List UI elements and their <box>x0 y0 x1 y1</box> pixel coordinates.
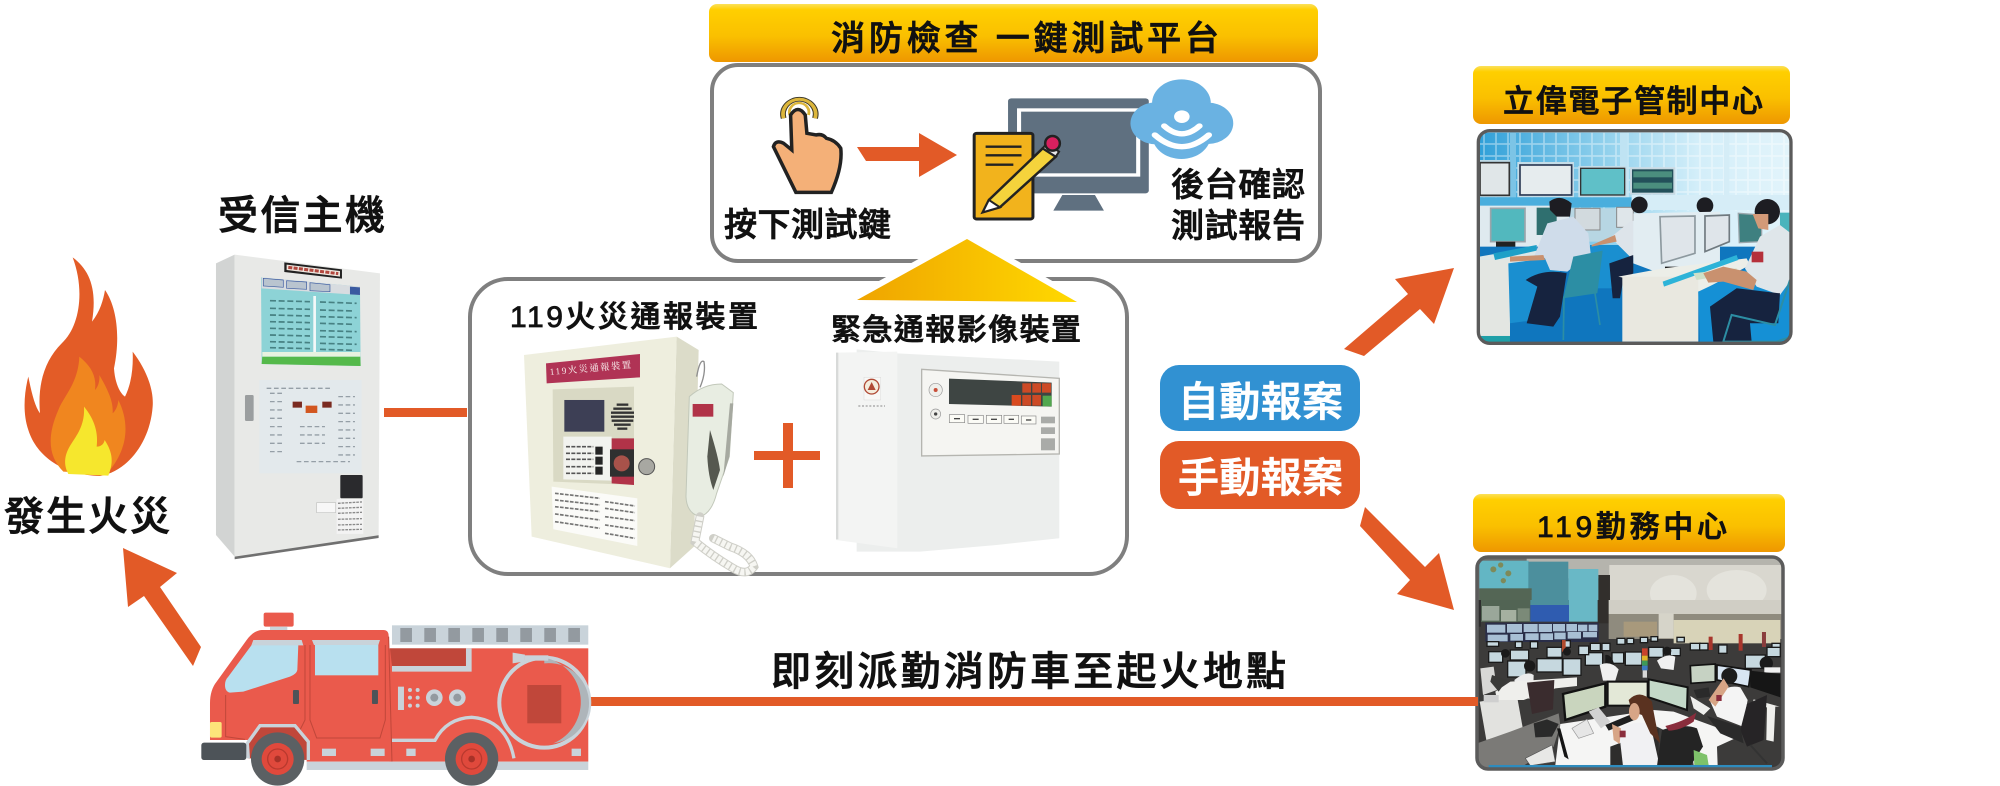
foreground monitors <box>1563 664 1780 720</box>
body <box>389 648 588 762</box>
title: one-touch test platform: 消防檢查 一鍵測試平台 <box>831 20 1219 58</box>
mid people <box>1501 647 1780 700</box>
label: dispatch fire truck: 即刻派勤消防車至起火地點 <box>771 650 1286 694</box>
signal towers <box>1562 632 1766 678</box>
header: Liwei control center: 立偉電子管制中心 <box>1503 84 1763 119</box>
person middle <box>1631 197 1648 213</box>
compartment <box>390 648 472 672</box>
photo frame <box>1477 557 1783 769</box>
left cabinet and desk <box>1480 667 1497 695</box>
ladder <box>392 625 588 645</box>
hose reel <box>499 653 589 748</box>
icon: flame <box>25 257 153 476</box>
coiled cord <box>695 517 754 572</box>
triangle: upward link <box>857 239 1077 302</box>
screen <box>564 400 604 432</box>
floor <box>1480 246 1756 342</box>
indicator lights <box>1012 383 1052 406</box>
badge: manual reporting <box>1160 441 1360 509</box>
printer <box>340 475 363 498</box>
arrow: to 119 dispatch center <box>1360 507 1454 610</box>
left desk <box>1480 246 1537 264</box>
cab <box>210 630 392 762</box>
backpack chair <box>1657 726 1703 766</box>
woman operator <box>1612 695 1660 766</box>
video wall lower section <box>1481 600 1598 622</box>
device: emergency video reporting device <box>836 349 1059 552</box>
label: backend confirms test report: 測試報告 <box>1171 207 1305 244</box>
control window <box>553 387 634 485</box>
label: press test key: 按下測試鍵 <box>724 206 891 243</box>
connector: control panel to devices <box>384 408 467 417</box>
arrow: to Liwei control center <box>1344 268 1454 356</box>
header: 119 dispatch center: 119勤務中心 <box>1537 511 1727 544</box>
heading: fire alarm control panel: 受信主機 <box>218 194 385 238</box>
man operator <box>1707 668 1767 763</box>
person left <box>1549 198 1572 217</box>
label: 119 fire reporting device: 119火災通報裝置 <box>510 301 758 334</box>
mid room monitors <box>1487 637 1780 677</box>
wheels <box>251 732 498 786</box>
badge: automatic reporting: 自動報案 <box>1178 379 1343 425</box>
photo: Liwei control center <box>1478 131 1792 345</box>
label: fire occurs: 發生火災 <box>4 495 170 539</box>
control buttons <box>929 383 1055 450</box>
running board <box>307 749 588 770</box>
control gauges <box>398 687 466 710</box>
door handle <box>245 395 254 421</box>
back partitions <box>1479 206 1569 249</box>
title bar: one-touch test platform <box>709 4 1318 62</box>
upper room <box>1478 558 1782 600</box>
display <box>949 379 1052 407</box>
speaker <box>611 405 634 429</box>
icon: fire truck <box>201 613 589 786</box>
key lock <box>639 459 655 475</box>
windows <box>225 640 380 693</box>
door handles <box>293 690 378 704</box>
hanger <box>697 361 704 387</box>
icon: document and pencil <box>974 133 1060 219</box>
bumper <box>201 743 246 760</box>
icon: pressing finger <box>773 99 841 192</box>
device: fire alarm control panel <box>216 255 380 559</box>
red label: 119火災通報裝置 <box>549 359 632 378</box>
icon: monitor <box>1008 98 1149 211</box>
arrow: press to report <box>857 133 957 177</box>
control face <box>922 369 1059 456</box>
title plate <box>284 262 342 279</box>
beacon <box>264 613 294 627</box>
arrow: truck to fire <box>123 548 201 666</box>
notice sheets <box>317 499 363 534</box>
touch screen <box>261 277 361 366</box>
device: 119 fire reporting device <box>524 337 754 572</box>
wheel arches <box>392 717 514 758</box>
line: dispatch center to truck <box>588 697 1478 706</box>
keyboard and phones <box>1525 687 1710 766</box>
headlight <box>210 722 222 738</box>
centre partition <box>1633 212 1720 273</box>
instructions <box>552 487 637 546</box>
left chair <box>1527 680 1554 714</box>
floor <box>1477 713 1560 770</box>
label: backend confirms test report: 後台確認 <box>1171 166 1305 203</box>
panel: reporting devices <box>470 279 1127 574</box>
photo: 119 dispatch center <box>1477 558 1787 773</box>
lower room <box>1477 600 1787 773</box>
label: emergency video reporting device: 緊急通報影像裝置 <box>831 314 1081 347</box>
foreground desks <box>1555 710 1740 765</box>
plus sign <box>754 423 820 488</box>
monitor wall <box>1485 623 1599 642</box>
badge: automatic reporting <box>1160 365 1360 431</box>
indicator panel <box>259 380 362 473</box>
panel: one-touch test platform <box>712 65 1320 261</box>
header: Liwei control center <box>1473 66 1790 124</box>
badge: manual reporting: 手動報案 <box>1178 455 1343 501</box>
header: 119 dispatch center <box>1473 494 1785 552</box>
door lines <box>226 637 392 762</box>
label: backend confirms test report <box>1171 166 1305 244</box>
handset <box>686 384 733 517</box>
buttons and alarm switch <box>563 437 634 485</box>
red label <box>546 354 640 383</box>
person right <box>1755 199 1780 224</box>
logo <box>858 377 885 406</box>
right desk <box>1618 258 1750 292</box>
icon: cloud wifi <box>1130 79 1233 159</box>
